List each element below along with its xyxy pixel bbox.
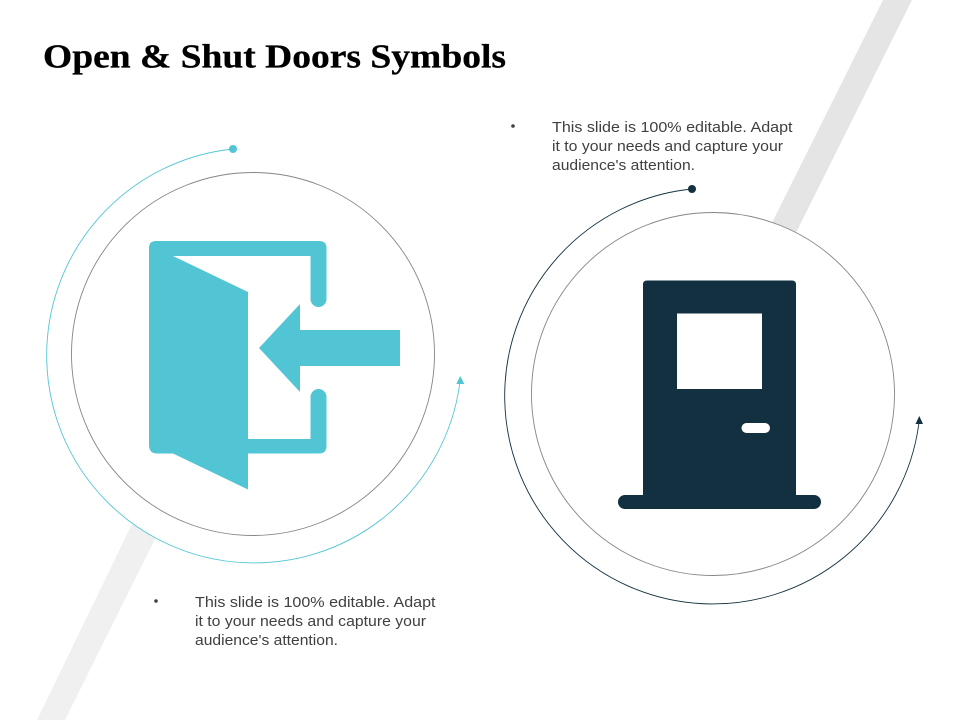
lower diagonal band	[37, 493, 170, 720]
text block: top right: This slide is 100% editable. Adapt	[552, 119, 793, 136]
panel: open door	[47, 145, 464, 563]
icon: open door with arrow	[149, 241, 400, 490]
panel: shut door	[505, 185, 923, 604]
text block: bottom left: This slide is 100% editable. Adapt	[195, 594, 436, 611]
outer progress arc: shut door	[505, 185, 923, 604]
text block: top right	[511, 119, 793, 174]
text block: bottom left	[154, 594, 436, 649]
text block: bottom left: audience's attention.	[195, 632, 338, 649]
text block: top right: it to your needs and capture your	[552, 138, 783, 155]
icon: shut door	[618, 280, 821, 509]
title: Open & Shut Doors Symbols	[43, 38, 506, 76]
text block: top right: audience's attention.	[552, 157, 695, 174]
inner circle: open door	[72, 172, 434, 536]
upper diagonal band	[745, 0, 912, 287]
text block: bottom left: it to your needs and capture your	[195, 613, 426, 630]
inner circle: shut door	[532, 212, 894, 576]
outer progress arc: open door	[47, 145, 464, 563]
